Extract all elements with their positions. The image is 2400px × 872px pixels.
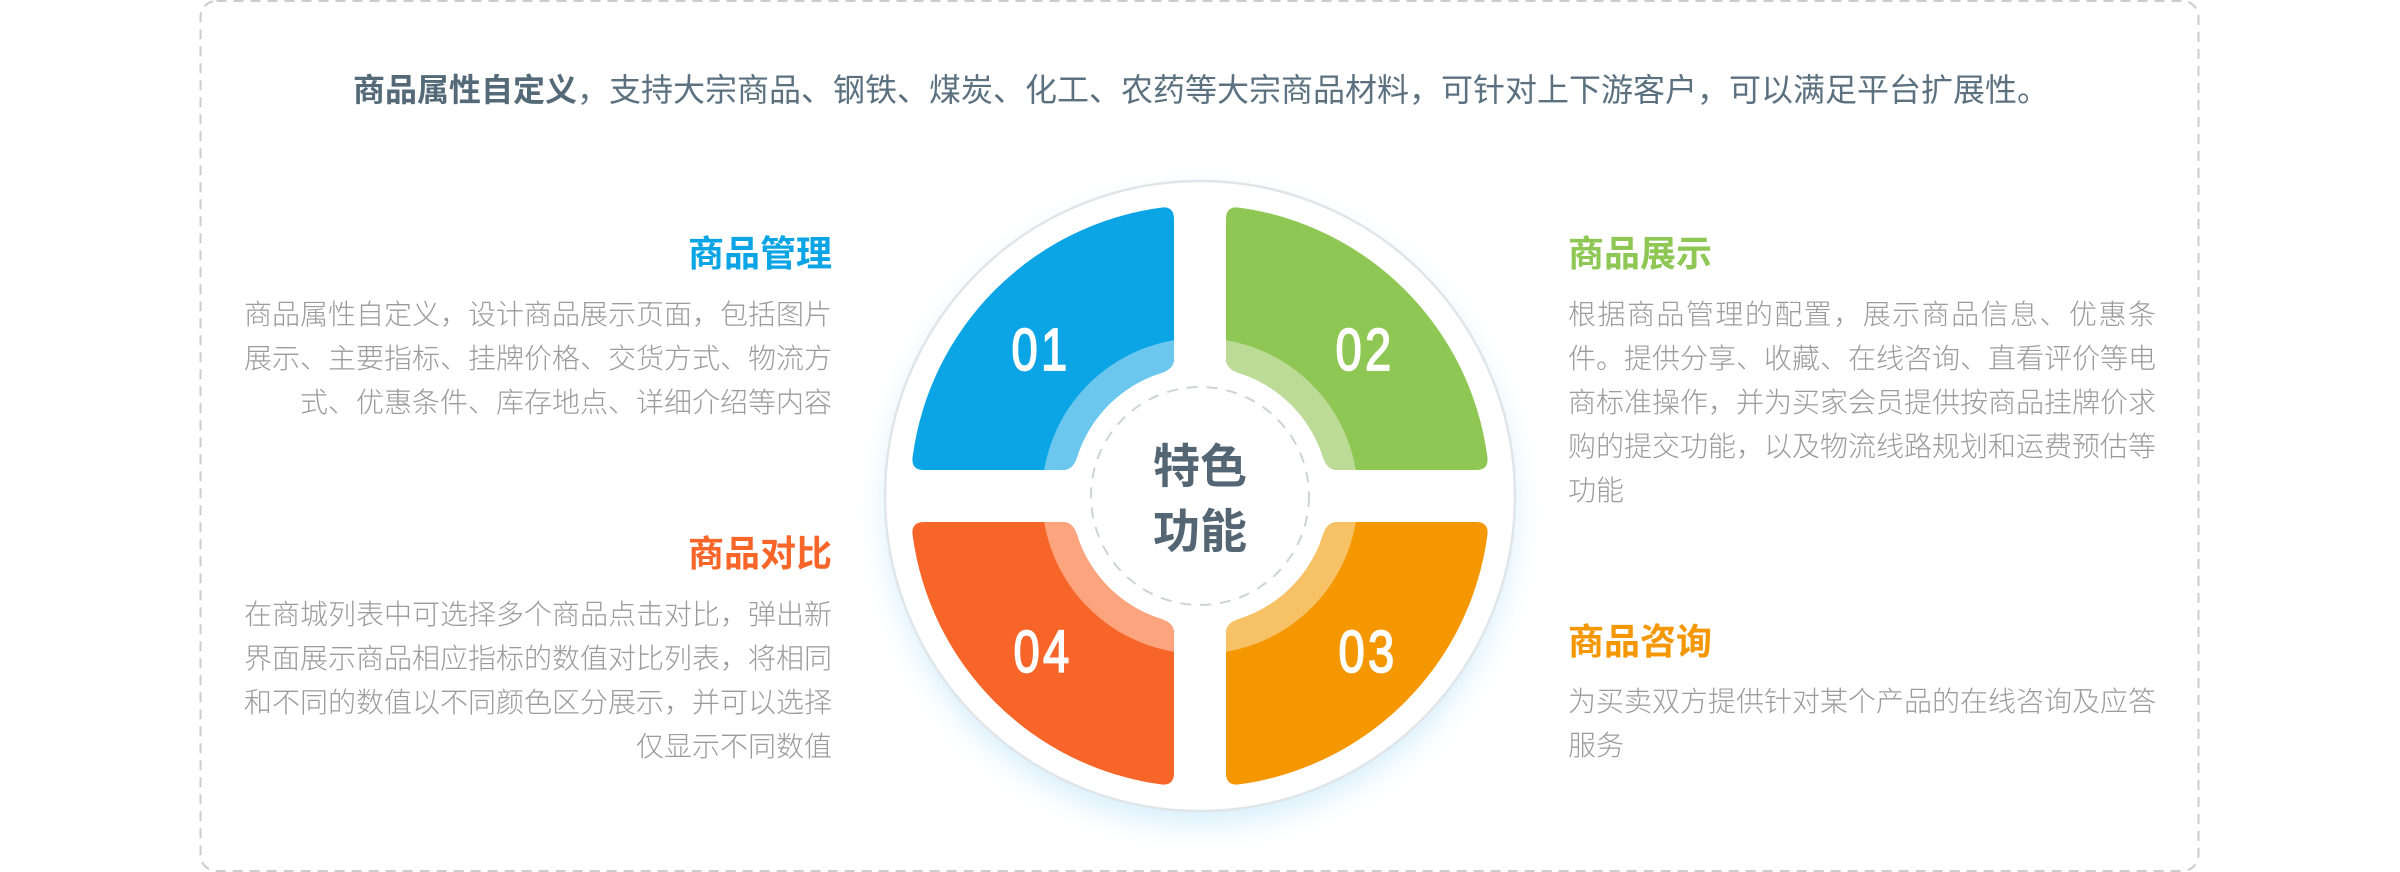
quadrant 04 red-orange — [912, 522, 1174, 785]
heading: 商品对比: 商品对比 — [688, 533, 832, 574]
number 01: 01 — [1012, 318, 1070, 383]
number 02: 02 — [1336, 318, 1394, 383]
outer circle glow — [885, 181, 1515, 811]
chart: four-quadrant feature wheel — [884, 180, 1516, 812]
center label — [1153, 440, 1247, 558]
outer circle — [885, 181, 1515, 811]
panel: 商品对比 — [244, 533, 832, 762]
text: 商品对比 description: 在商城列表中可选择多个商品点击对比，弹出新 — [244, 599, 832, 630]
text: 商品展示 description: 根据商品管理的配置，展示商品信息、优惠条 — [1568, 299, 2157, 330]
quadrant 03 orange — [1226, 522, 1488, 785]
text: 商品咨询 description — [1568, 686, 2156, 761]
panel: 商品管理 — [244, 233, 832, 418]
text: 商品对比 description: 仅显示不同数值 — [636, 731, 832, 762]
text: 商品对比 description — [244, 599, 832, 762]
text: 商品对比 description: 界面展示商品相应指标的数值对比列表，将相同 — [244, 643, 832, 674]
text: 商品管理 description: 商品属性自定义，设计商品展示页面，包括图片 — [244, 299, 832, 330]
text: 商品展示 description: 商标准操作，并为买家会员提供按商品挂牌价求 — [1568, 387, 2156, 418]
center dashed circle — [1091, 387, 1309, 605]
panel: 商品咨询 — [1568, 621, 2156, 761]
center label: 功能 — [1153, 505, 1247, 558]
heading: 商品管理: 商品管理 — [688, 233, 832, 274]
text: 商品管理 description: 展示、主要指标、挂牌价格、交货方式、物流方 — [244, 343, 832, 374]
panel: 商品展示 — [1568, 233, 2157, 506]
text: 商品展示 description: 功能 — [1568, 475, 1624, 506]
intro text: 商品属性自定义，支持大宗商品、钢铁、煤炭、化工、农药等大宗商品材料，可针对上下游客户，可以满足平台扩展性。 — [353, 72, 2049, 108]
number 03: 03 — [1339, 620, 1397, 685]
quadrant 01 blue — [912, 207, 1174, 470]
text: 商品管理 description — [244, 299, 832, 418]
text: 商品咨询 description: 为买卖双方提供针对某个产品的在线咨询及应答 — [1568, 686, 2156, 717]
quadrant 02 green — [1226, 207, 1488, 470]
heading: 商品咨询: 商品咨询 — [1568, 621, 1712, 662]
text: 商品对比 description: 和不同的数值以不同颜色区分展示，并可以选择 — [244, 687, 832, 718]
text: 商品管理 description: 式、优惠条件、库存地点、详细介绍等内容 — [300, 387, 832, 418]
center label: 特色 — [1153, 440, 1247, 493]
heading: 商品展示: 商品展示 — [1568, 233, 1712, 274]
number 04: 04 — [1014, 620, 1072, 685]
text: 商品展示 description: 购的提交功能，以及物流线路规划和运费预估等 — [1568, 431, 2156, 462]
text: 商品咨询 description: 服务 — [1568, 730, 1624, 761]
text: 商品展示 description: 件。提供分享、收藏、在线咨询、直看评价等电 — [1568, 343, 2156, 374]
text: 商品展示 description — [1568, 299, 2157, 506]
